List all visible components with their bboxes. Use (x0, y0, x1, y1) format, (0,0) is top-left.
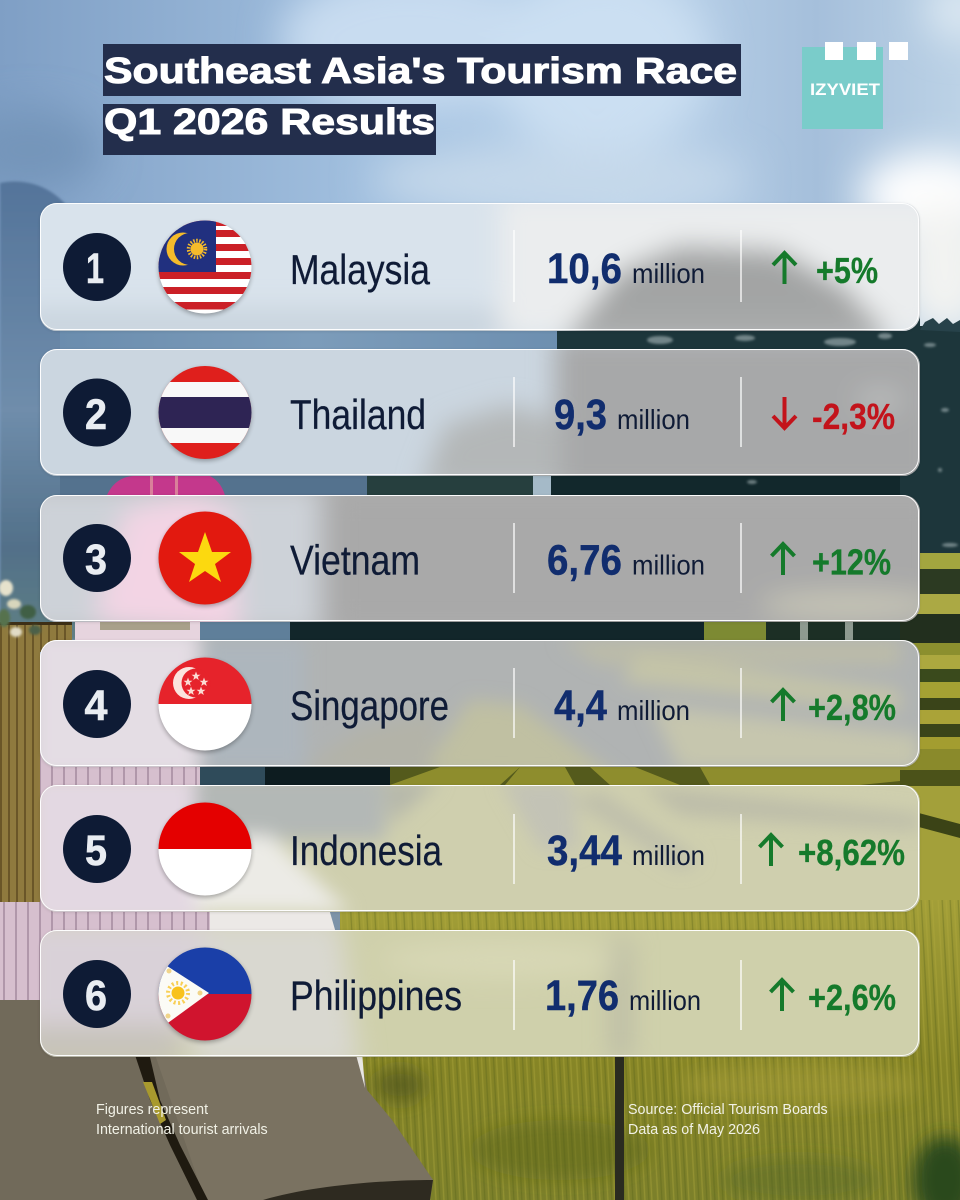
flag: Vietnam (158, 511, 251, 606)
rice field (340, 900, 960, 1200)
panel: rank 2 Thailand (40, 349, 919, 475)
arrivals value: million (632, 258, 704, 288)
panel: rank 4 Singapore (40, 640, 919, 766)
arrivals value: 9,3 (554, 390, 606, 438)
arrivals value (546, 244, 704, 292)
arrivals value: million (632, 549, 704, 580)
rank badge (62, 814, 130, 882)
country name: Thailand (290, 390, 426, 438)
footnote: left: International tourist arrivals (96, 1122, 268, 1138)
title text: Q1 2026 Results (104, 101, 435, 142)
title (103, 44, 741, 155)
growth change: -2,3% (812, 396, 894, 436)
wooden bench (0, 1000, 433, 1200)
arrivals value (546, 826, 704, 874)
footnote: source: Source: Official Tourism Boards (628, 1102, 828, 1118)
growth change: +2,6% (808, 976, 896, 1018)
rank badge (62, 378, 130, 446)
arrivals value: 1,76 (544, 972, 618, 1020)
growth change (771, 541, 890, 582)
footnote: left: Figures represent (96, 1102, 208, 1118)
arrivals value: 3,44 (546, 826, 622, 874)
rank badge (62, 232, 130, 300)
arrivals value: million (616, 694, 690, 726)
panel: rank 1 Malaysia (40, 203, 919, 330)
footnote: source (628, 1102, 828, 1138)
country name: Philippines (290, 972, 462, 1018)
woman clothing bands (40, 750, 200, 802)
logo: IZYVIET: IZYVIET (810, 80, 881, 99)
rank badge (62, 670, 130, 738)
country name: Singapore (290, 682, 448, 728)
panel: rank 6 Philippines (40, 930, 919, 1056)
trees (557, 314, 920, 366)
arrivals value (554, 682, 690, 730)
growth change: +12% (812, 541, 890, 582)
rank badge: 1 (86, 244, 104, 292)
rank badge (62, 960, 130, 1028)
logo: IZYVIET (802, 42, 908, 129)
growth change (770, 976, 896, 1018)
footnote: left (96, 1102, 268, 1138)
flag: Indonesia (158, 802, 252, 897)
arrivals value: 4,4 (554, 682, 607, 730)
flag: Singapore (158, 656, 252, 752)
growth change: +5% (816, 250, 878, 290)
growth change (771, 686, 896, 728)
arrivals value (554, 390, 690, 438)
flag: Philippines (150, 946, 252, 1042)
arrivals value (544, 972, 700, 1020)
title text: Southeast Asia's Tourism Race (104, 50, 737, 91)
right margin terraces (900, 553, 960, 946)
arrivals value: million (628, 984, 700, 1016)
title bar line 2 (103, 104, 436, 155)
rank badge (62, 524, 130, 592)
country name: Indonesia (290, 826, 442, 874)
country name: Vietnam (290, 536, 420, 583)
country name: Malaysia (290, 246, 430, 292)
arrivals value (546, 536, 704, 584)
rank badge: 3 (84, 536, 106, 584)
flag: Thailand (158, 366, 252, 460)
hat (105, 476, 226, 500)
growth change (759, 832, 904, 872)
growth change (772, 396, 894, 436)
arrivals value: million (632, 840, 704, 870)
title text (104, 50, 737, 142)
gap band behind panels (60, 314, 560, 366)
terraces gap bands (200, 750, 265, 802)
rank badge: 4 (84, 682, 107, 730)
panel: rank 3 Vietnam (40, 495, 919, 621)
mountain left (0, 182, 80, 640)
glass panel surfaces (40, 203, 920, 1057)
arrivals value: 6,76 (546, 536, 622, 584)
rank badge: 2 (84, 390, 106, 438)
arrivals value: 10,6 (546, 244, 622, 292)
panel: rank 5 Indonesia (40, 785, 919, 911)
basket with flowers (0, 640, 40, 902)
rank badge: 5 (84, 826, 106, 874)
rank badge: 6 (84, 972, 106, 1020)
title bar line 1 (103, 44, 741, 96)
growth change: +8,62% (798, 832, 904, 872)
growth change (772, 250, 878, 290)
growth change: +2,8% (808, 686, 896, 728)
flag: Malaysia (158, 220, 252, 315)
footnote: source: Data as of May 2026 (628, 1122, 760, 1138)
arrivals value: million (616, 404, 690, 434)
